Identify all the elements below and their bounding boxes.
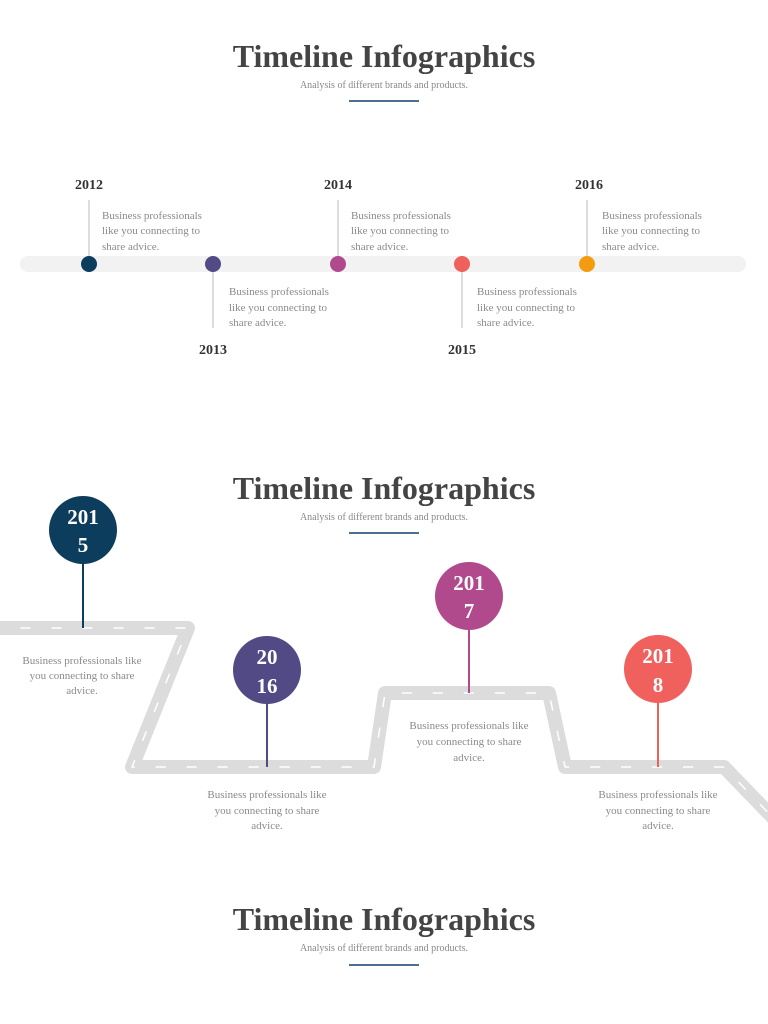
header 2: Timeline Infographics <box>233 470 535 506</box>
item 2014: share advice. <box>351 241 409 253</box>
item 2012: share advice. <box>102 241 160 253</box>
marker 2018: you connecting to share <box>606 805 711 817</box>
marker 2015: advice. <box>66 685 98 697</box>
header 1: Timeline Infographics <box>233 38 535 74</box>
marker 2016: advice. <box>251 820 283 832</box>
marker 2016 <box>207 636 327 832</box>
item 2016 <box>575 178 702 272</box>
item 2013: 2013 <box>199 343 227 358</box>
marker 2017: you connecting to share <box>417 736 522 748</box>
header 3 <box>233 901 535 966</box>
header 3: Analysis of different brands and products. <box>300 943 468 954</box>
header 1: Analysis of different brands and products. <box>300 80 468 91</box>
marker 2015: 201 <box>67 505 99 529</box>
marker 2017: advice. <box>453 752 485 764</box>
item 2015: Business professionals <box>477 286 577 298</box>
item 2012 <box>75 178 202 272</box>
marker 2015 <box>22 496 142 697</box>
header 3: Timeline Infographics <box>233 901 535 937</box>
item 2012: like you connecting to <box>102 225 201 237</box>
marker 2015: 5 <box>78 533 88 557</box>
item 2014: like you connecting to <box>351 225 450 237</box>
timeline 1 bar <box>20 256 746 272</box>
item 2013: share advice. <box>229 317 287 329</box>
header 2 <box>233 470 535 534</box>
marker 2018 <box>598 635 718 832</box>
item 2014 <box>324 178 451 272</box>
marker 2016: you connecting to share <box>215 805 320 817</box>
item 2015: 2015 <box>448 343 476 358</box>
marker 2015: Business professionals like <box>22 655 142 667</box>
marker 2017 <box>409 562 529 764</box>
marker 2016: 16 <box>256 674 278 698</box>
item 2014: Business professionals <box>351 210 451 222</box>
marker 2018: Business professionals like <box>598 789 718 801</box>
marker 2016: Business professionals like <box>207 789 327 801</box>
road <box>0 628 768 825</box>
item 2014: 2014 <box>324 178 352 193</box>
marker 2017: 201 <box>453 571 485 595</box>
item 2016: Business professionals <box>602 210 702 222</box>
marker 2017: 7 <box>464 599 474 623</box>
item 2013 <box>199 256 329 358</box>
item 2016: share advice. <box>602 241 660 253</box>
item 2013: Business professionals <box>229 286 329 298</box>
marker 2015: you connecting to share <box>30 670 135 682</box>
item 2015: share advice. <box>477 317 535 329</box>
header 1 <box>233 38 535 102</box>
item 2012: 2012 <box>75 178 103 193</box>
item 2015: like you connecting to <box>477 302 576 314</box>
item 2015 <box>448 256 577 358</box>
item 2013: like you connecting to <box>229 302 328 314</box>
item 2016: 2016 <box>575 178 603 193</box>
marker 2018: advice. <box>642 820 674 832</box>
header 2: Analysis of different brands and products. <box>300 512 468 523</box>
item 2012: Business professionals <box>102 210 202 222</box>
item 2016: like you connecting to <box>602 225 701 237</box>
marker 2016: 20 <box>256 645 278 669</box>
marker 2017: Business professionals like <box>409 720 529 732</box>
marker 2018: 201 <box>642 644 674 668</box>
marker 2018: 8 <box>653 673 663 697</box>
